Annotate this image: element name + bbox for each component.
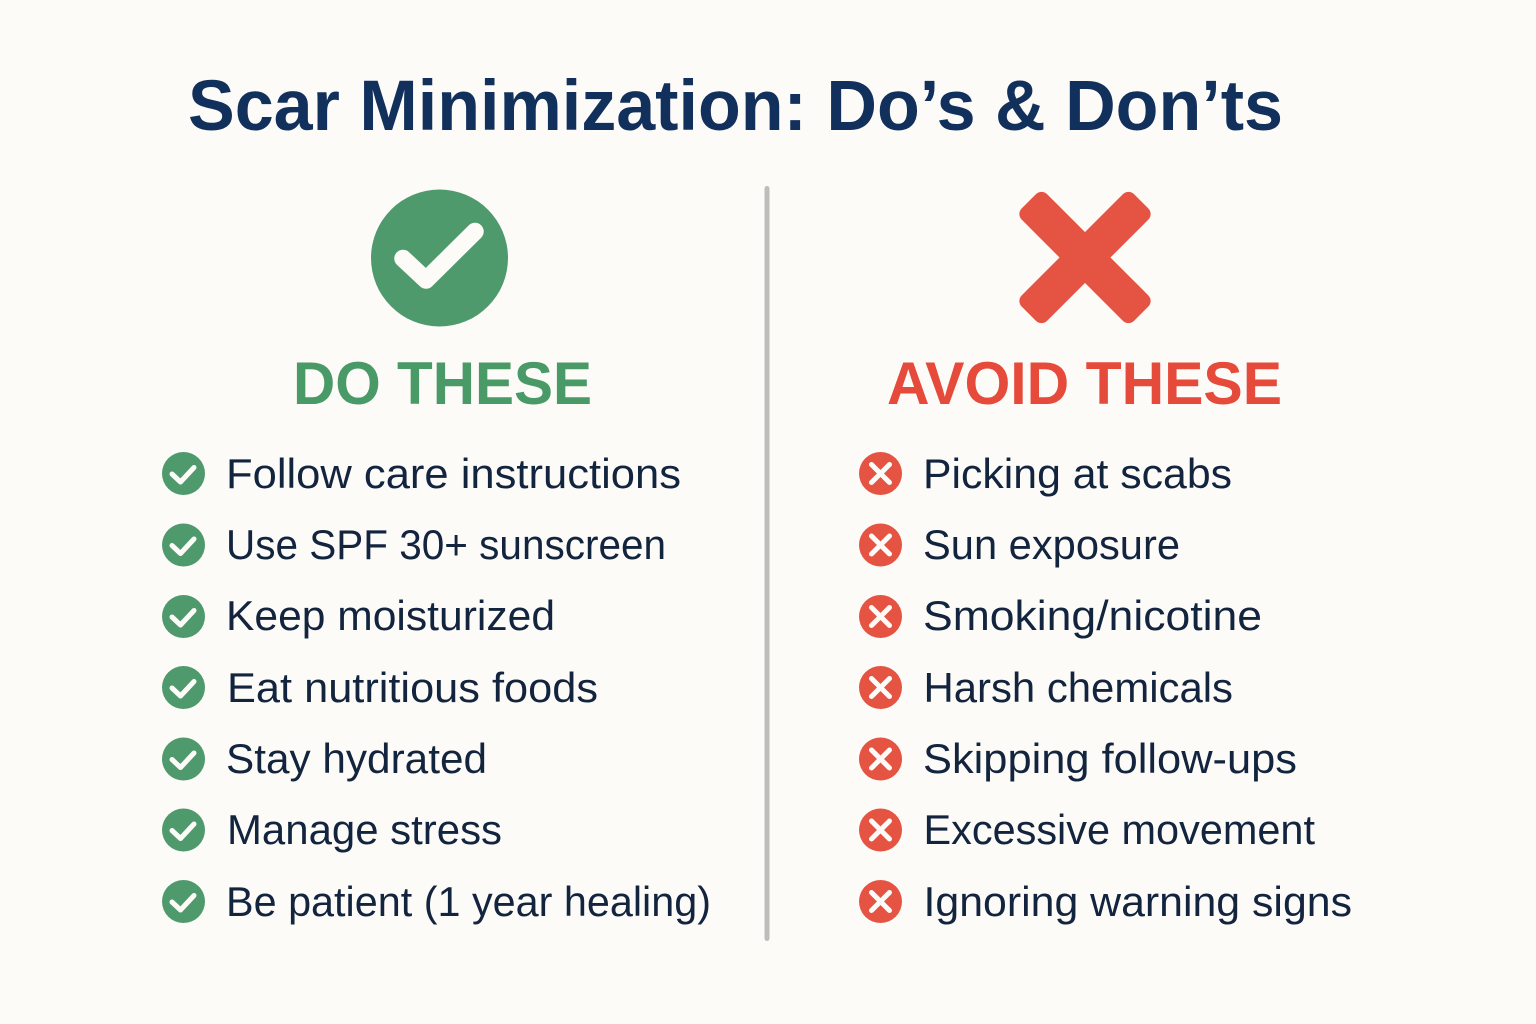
list: avoid items bbox=[859, 450, 1352, 925]
item: eat nutritious foods: Eat nutritious foods bbox=[227, 664, 598, 711]
center divider bbox=[764, 186, 770, 941]
item: follow care instructions: Follow care instructions bbox=[226, 450, 681, 497]
item: excessive movement: Excessive movement bbox=[924, 806, 1315, 853]
heading: do these: DO THESE bbox=[293, 350, 592, 417]
item: smoking/nicotine: Smoking/nicotine bbox=[923, 592, 1262, 639]
icon: large green check bbox=[371, 190, 508, 326]
item: be patient: Be patient (1 year healing) bbox=[226, 878, 711, 925]
item: picking at scabs: Picking at scabs bbox=[923, 450, 1232, 497]
item: ignoring warning signs: Ignoring warning signs bbox=[924, 878, 1352, 925]
item: harsh chemicals: Harsh chemicals bbox=[924, 664, 1233, 711]
item: keep moisturized: Keep moisturized bbox=[226, 592, 555, 639]
item: sun exposure: Sun exposure bbox=[923, 521, 1180, 568]
panel: do these bbox=[162, 190, 711, 925]
item: manage stress: Manage stress bbox=[227, 806, 502, 853]
icon: large red x bbox=[1016, 189, 1154, 326]
panel: avoid these bbox=[859, 189, 1352, 925]
heading: avoid these: AVOID THESE bbox=[887, 350, 1282, 417]
item: use spf 30+ sunscreen: Use SPF 30+ sunscreen bbox=[226, 521, 666, 568]
list: do items bbox=[162, 450, 711, 925]
title: Scar Minimization: Do’s & Don’ts bbox=[188, 67, 1283, 146]
item: skipping follow-ups: Skipping follow-ups bbox=[923, 735, 1297, 782]
item: stay hydrated: Stay hydrated bbox=[226, 735, 487, 782]
